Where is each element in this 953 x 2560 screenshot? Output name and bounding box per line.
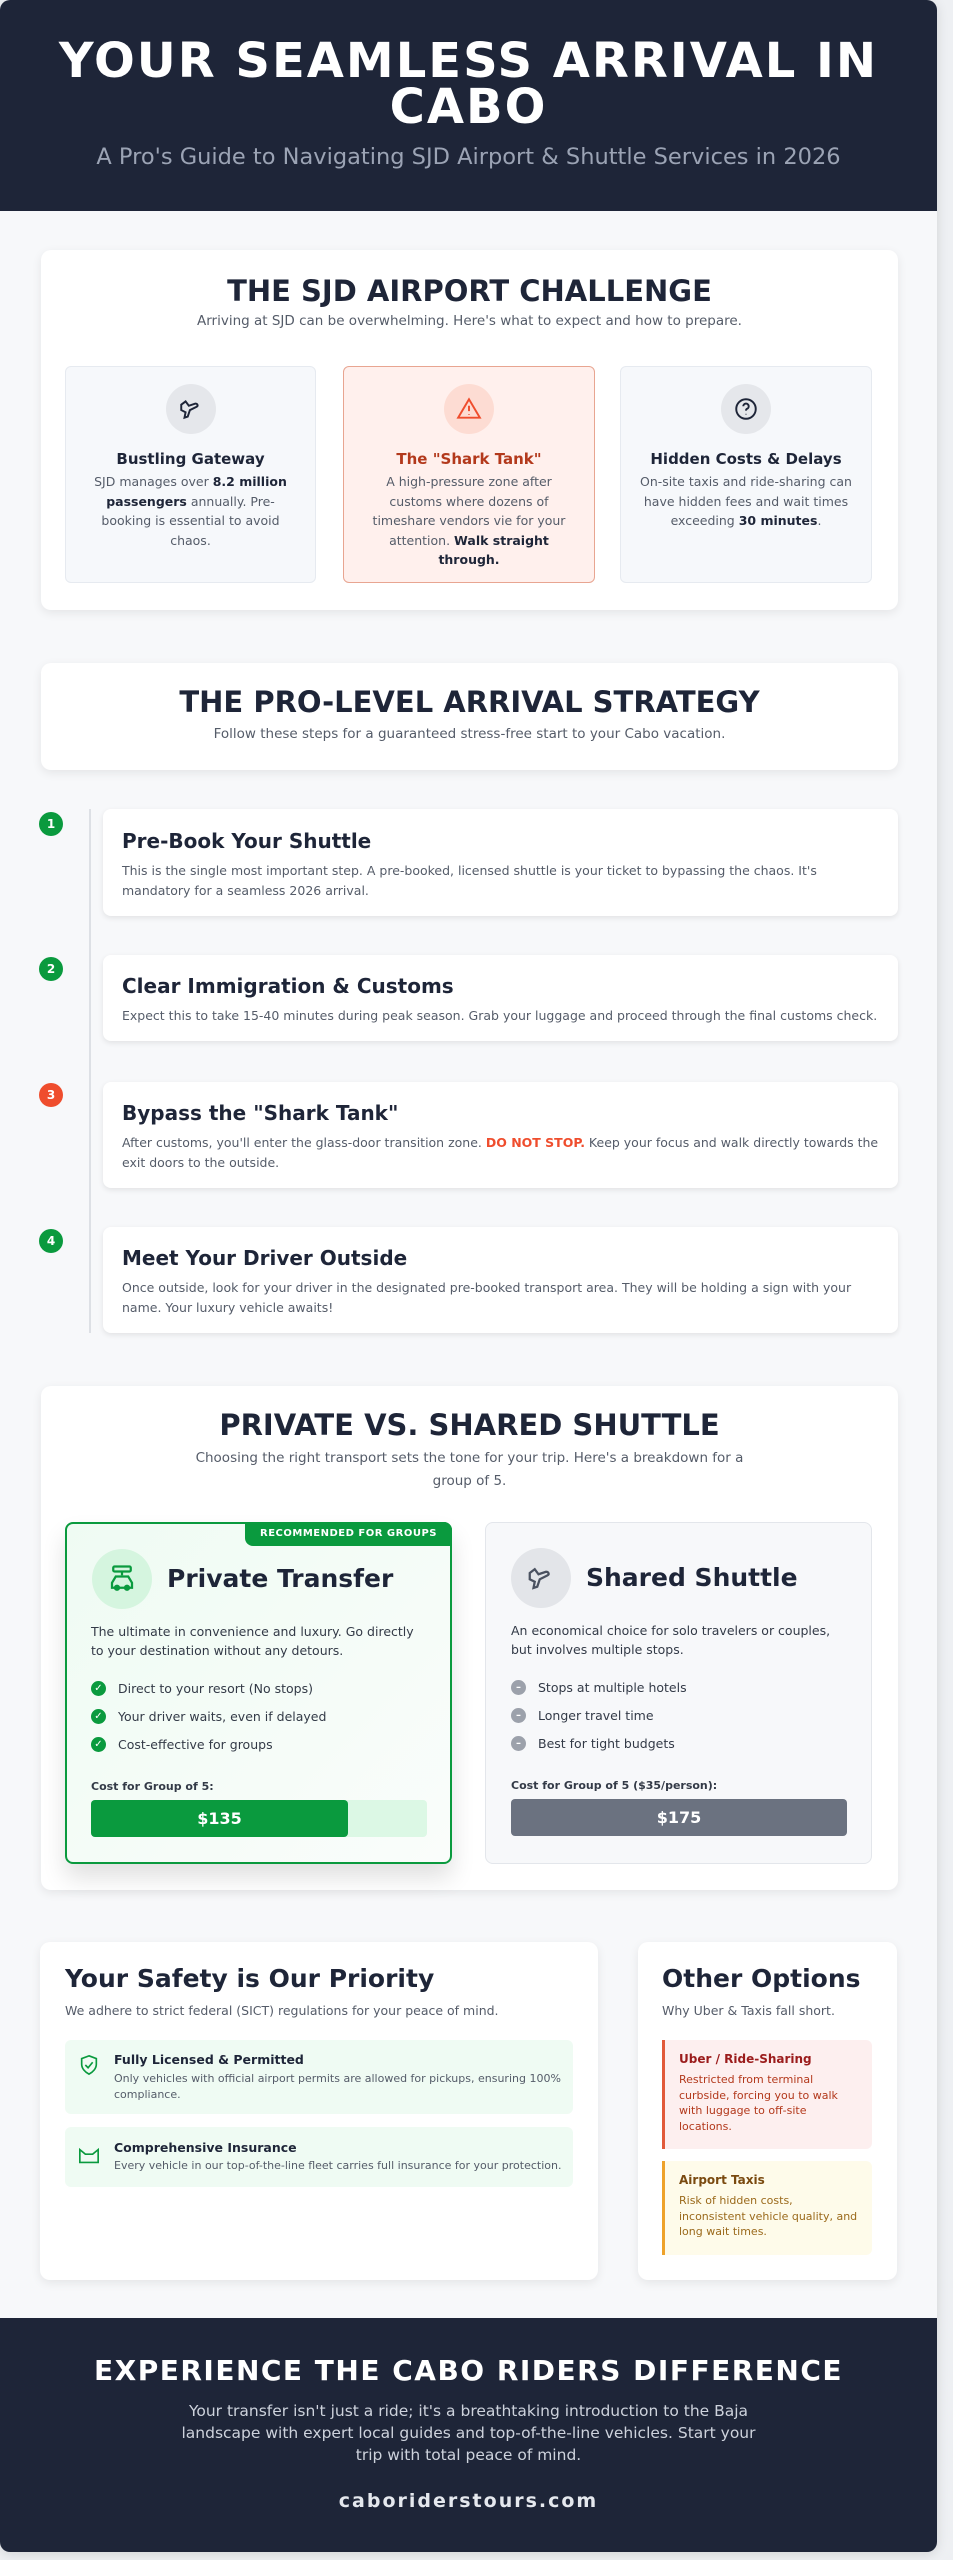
step 4: Once outside, look for your driver in the designated pre-booked transport area. They will be holding a sign with your name. Your luxury vehicle awaits!: [122, 1280, 851, 1315]
step 1 marker: 1: [47, 817, 55, 831]
step 1: [103, 809, 898, 916]
subcard: shark tank: [343, 366, 595, 583]
option: uber: [662, 2040, 872, 2149]
benefits list: Direct to your resort (No stops): [118, 1680, 313, 1696]
icon: warning: [444, 384, 494, 434]
cost label: Cost for Group of 5 ($35/person):: [511, 1779, 717, 1792]
step 3 marker: 3: [47, 1088, 55, 1102]
panel: SJD airport challenge: [41, 250, 898, 610]
step 4: Meet Your Driver Outside: [122, 1246, 407, 1270]
intro: We adhere to strict federal (SICT) regulations for your peace of mind.: [65, 2003, 499, 2018]
badge: RECOMMENDED FOR GROUPS: [260, 1528, 437, 1539]
step 2: Expect this to take 15-40 minutes during peak season. Grab your luggage and proceed through the final customs check.: [122, 1008, 877, 1023]
icon: plane: [166, 384, 216, 434]
drawbacks list: Best for tight budgets: [538, 1736, 675, 1750]
cost label: Cost for Group of 5:: [91, 1780, 214, 1793]
option: uber: Uber / Ride-Sharing: [679, 2052, 812, 2066]
feature: insurance: [65, 2127, 573, 2187]
step 3 marker: [39, 1083, 63, 1107]
description: The ultimate in convenience and luxury. Go directly to your destination without any detours.: [91, 1624, 414, 1658]
panel: private vs shared: [41, 1386, 898, 1890]
cost bar: $135: [197, 1809, 242, 1828]
step 2 marker: [39, 957, 63, 981]
step 2: Clear Immigration & Customs: [122, 974, 454, 998]
subcard: hidden costs: On-site taxis and ride-sharing can have hidden fees and wait times exceeding 30 minutes.: [640, 474, 852, 528]
step 3: [103, 1082, 898, 1188]
feature: licensed: Fully Licensed & Permitted: [114, 2052, 304, 2067]
subcard: bustling gateway: Bustling Gateway: [116, 450, 265, 468]
drawbacks list: –: [516, 1738, 521, 1748]
subcard: shark tank: The "Shark Tank": [396, 450, 542, 468]
panel: safety: [40, 1942, 598, 2280]
benefits list: ✓: [94, 1710, 103, 1722]
heading: THE PRO-LEVEL ARRIVAL STRATEGY: [179, 685, 760, 719]
website: caboriderstours.com: [339, 2490, 598, 2512]
feature: licensed: [65, 2040, 573, 2114]
heading: Your Safety is Our Priority: [65, 1964, 434, 1993]
benefits list: Your driver waits, even if delayed: [118, 1708, 326, 1724]
title: YOUR SEAMLESS ARRIVAL IN CABO: [59, 33, 878, 135]
benefits list: ✓: [94, 1738, 103, 1750]
benefits list: [91, 1680, 326, 1752]
step 4 marker: [39, 1229, 63, 1253]
step 1: This is the single most important step. A pre-booked, licensed shuttle is your ticket to bypassing the chaos. It's mandatory for a seamless 2026 arrival.: [122, 863, 817, 898]
subcard: bustling gateway: SJD manages over 8.2 million passengers annually. Pre-booking is essential to avoid chaos.: [94, 474, 287, 548]
step 2 marker: 2: [47, 962, 55, 976]
footer: [0, 2318, 937, 2552]
badge: [245, 1522, 452, 1546]
option: taxis: [662, 2161, 872, 2255]
title: Shared Shuttle: [586, 1563, 798, 1592]
panel: arrival strategy heading: [41, 663, 898, 770]
cost bar: $175: [657, 1808, 701, 1827]
option: private transfer: [65, 1522, 452, 1864]
icon: question: [721, 384, 771, 434]
cost bar: [91, 1800, 427, 1837]
drawbacks list: –: [516, 1682, 521, 1692]
drawbacks list: Stops at multiple hotels: [538, 1680, 687, 1694]
subcard: shark tank: A high-pressure zone after customs where dozens of timeshare vendors vie for your attention. Walk straight through.: [373, 474, 565, 567]
step 4 marker: 4: [47, 1234, 55, 1248]
benefits list: ✓: [94, 1682, 103, 1694]
icon: plane: [511, 1548, 571, 1608]
icon: car: [92, 1549, 152, 1609]
header: [0, 0, 937, 211]
icon: shield: [80, 2055, 98, 2076]
step 3: After customs, you'll enter the glass-door transition zone. DO NOT STOP. Keep your focus and walk directly towards the exit doors to the outside.: [122, 1135, 878, 1170]
timeline: [89, 809, 91, 1333]
option: uber: Restricted from terminal curbside, forcing you to walk with luggage to off-site locations.: [679, 2073, 838, 2132]
feature: insurance: Every vehicle in our top-of-the-line fleet carries full insurance for your protection.: [114, 2159, 561, 2172]
heading: PRIVATE VS. SHARED SHUTTLE: [219, 1408, 720, 1442]
subcard: hidden costs: Hidden Costs & Delays: [650, 450, 842, 468]
description: An economical choice for solo travelers or couples, but involves multiple stops.: [511, 1623, 830, 1657]
cost bar: [511, 1799, 847, 1836]
heading: Other Options: [662, 1964, 861, 1993]
heading: THE SJD AIRPORT CHALLENGE: [227, 274, 712, 308]
subtitle: A Pro's Guide to Navigating SJD Airport & Shuttle Services in 2026: [96, 144, 841, 170]
feature: insurance: Comprehensive Insurance: [114, 2140, 297, 2155]
intro: Why Uber & Taxis fall short.: [662, 2003, 835, 2018]
footer heading: EXPERIENCE THE CABO RIDERS DIFFERENCE: [94, 2354, 843, 2387]
drawbacks list: –: [516, 1710, 521, 1720]
footer text: Your transfer isn't just a ride; it's a breathtaking introduction to the Baja landscape with expert local guides and top-of-the-line vehicles. Start your trip with total peace of mind.: [181, 2402, 756, 2464]
panel: other options: [638, 1942, 897, 2280]
drawbacks list: [511, 1680, 687, 1751]
title: Private Transfer: [167, 1564, 393, 1593]
benefits list: Cost-effective for groups: [118, 1736, 273, 1752]
option: shared shuttle: [485, 1522, 872, 1864]
intro text: Arriving at SJD can be overwhelming. Here's what to expect and how to prepare.: [197, 313, 742, 329]
option: taxis: Airport Taxis: [679, 2173, 765, 2187]
step 1: Pre-Book Your Shuttle: [122, 829, 371, 853]
intro: Follow these steps for a guaranteed stress-free start to your Cabo vacation.: [214, 726, 725, 742]
step 2: [103, 955, 898, 1041]
subcard: hidden costs: [620, 366, 872, 583]
step 1 marker: [39, 812, 63, 836]
step 3: Bypass the "Shark Tank": [122, 1101, 398, 1125]
intro: Choosing the right transport sets the tone for your trip. Here's a breakdown for a group of 5.: [196, 1450, 743, 1489]
icon: insurance: [79, 2148, 99, 2164]
step 4: [103, 1227, 898, 1333]
option: taxis: Risk of hidden costs, inconsistent vehicle quality, and long wait times.: [679, 2194, 857, 2238]
feature: licensed: Only vehicles with official airport permits are allowed for pickups, ensuring 100% compliance.: [114, 2072, 561, 2101]
drawbacks list: Longer travel time: [538, 1708, 654, 1722]
subcard: bustling gateway: [65, 366, 316, 583]
